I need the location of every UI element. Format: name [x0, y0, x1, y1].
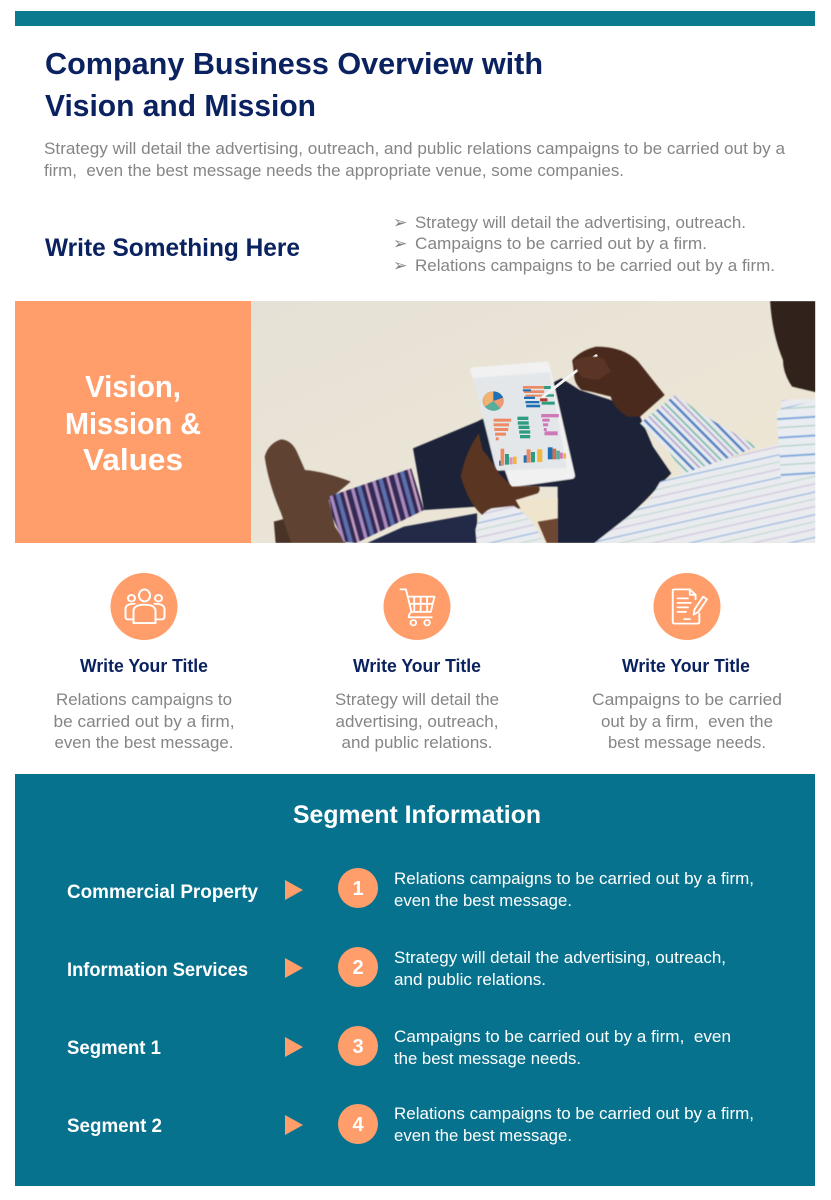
title: Company Business Overview with	[45, 46, 543, 81]
column: second feature	[335, 573, 499, 752]
segment row 2: Strategy will detail the advertising, outreach,	[394, 949, 726, 967]
column text	[54, 691, 234, 752]
column text	[592, 691, 782, 752]
photo: man reviewing charts on a tablet	[251, 301, 820, 543]
column: first feature	[54, 573, 234, 752]
segment row 4: even the best message.	[394, 1127, 572, 1145]
bullet list: Campaigns to be carried out by a firm.	[415, 234, 707, 253]
panel: vision mission and values: Vision,	[85, 369, 181, 404]
intro paragraph: firm, even the best message needs the appropriate venue, some companies.	[44, 161, 624, 180]
column text: even the best message.	[54, 734, 234, 752]
column title: Write Your Title	[353, 656, 481, 676]
bullet list: ➢	[393, 256, 407, 275]
title: Vision and Mission	[45, 88, 316, 123]
bullet list: ➢	[393, 234, 407, 253]
segment row 2	[67, 947, 726, 989]
title	[45, 46, 543, 123]
column text: be carried out by a firm,	[54, 713, 234, 731]
panel: vision mission and values: Mission &	[65, 406, 201, 441]
segment row 1: Commercial Property	[67, 881, 258, 903]
segment row 1	[67, 868, 754, 910]
column text: Relations campaigns to	[56, 691, 232, 709]
panel heading: Segment Information	[293, 801, 541, 829]
column: third feature	[592, 573, 782, 752]
panel: vision mission and values	[15, 301, 251, 543]
top accent bar	[15, 11, 815, 26]
segment row 1: 1	[352, 878, 364, 900]
column text: advertising, outreach,	[336, 713, 498, 731]
column text: best message needs.	[608, 734, 766, 752]
bullet list	[393, 213, 775, 275]
icon: people	[110, 573, 178, 640]
intro paragraph	[44, 139, 786, 180]
bullet list: Strategy will detail the advertising, outreach.	[415, 213, 746, 232]
column title: Write Your Title	[80, 656, 208, 676]
column text: Campaigns to be carried	[592, 691, 782, 709]
column text	[335, 691, 499, 752]
panel: segment information	[15, 774, 815, 1186]
bullet list: ➢	[393, 213, 407, 232]
subheading: Write Something Here	[45, 234, 300, 262]
icon: shopping cart	[384, 573, 450, 640]
bullet list: Relations campaigns to be carried out by a firm.	[415, 256, 775, 275]
icon: document and pen	[654, 573, 720, 640]
segment row 2: Information Services	[67, 959, 248, 981]
column text: and public relations.	[342, 734, 492, 752]
panel: vision mission and values: Values	[83, 442, 183, 477]
segment row 3: 3	[352, 1036, 364, 1058]
segment row 3: Campaigns to be carried out by a firm, even	[394, 1028, 731, 1046]
segment row 3: the best message needs.	[394, 1050, 581, 1068]
intro paragraph: Strategy will detail the advertising, outreach, and public relations campaigns to be carried out by a	[44, 139, 786, 158]
segment row 4	[67, 1104, 754, 1145]
segment row 3: Segment 1	[67, 1037, 161, 1059]
segment row 4: Relations campaigns to be carried out by a firm,	[394, 1105, 754, 1123]
segment row 2: and public relations.	[394, 971, 546, 989]
column title: Write Your Title	[622, 656, 750, 676]
column text: Strategy will detail the	[335, 691, 499, 709]
segment row 2: 2	[352, 957, 364, 979]
segment row 4: Segment 2	[67, 1115, 162, 1137]
segment row 1: even the best message.	[394, 892, 572, 910]
segment row 3	[67, 1026, 731, 1068]
segment row 4: 4	[352, 1114, 364, 1136]
column text: out by a firm, even the	[601, 713, 773, 731]
segment row 1: Relations campaigns to be carried out by a firm,	[394, 870, 754, 888]
